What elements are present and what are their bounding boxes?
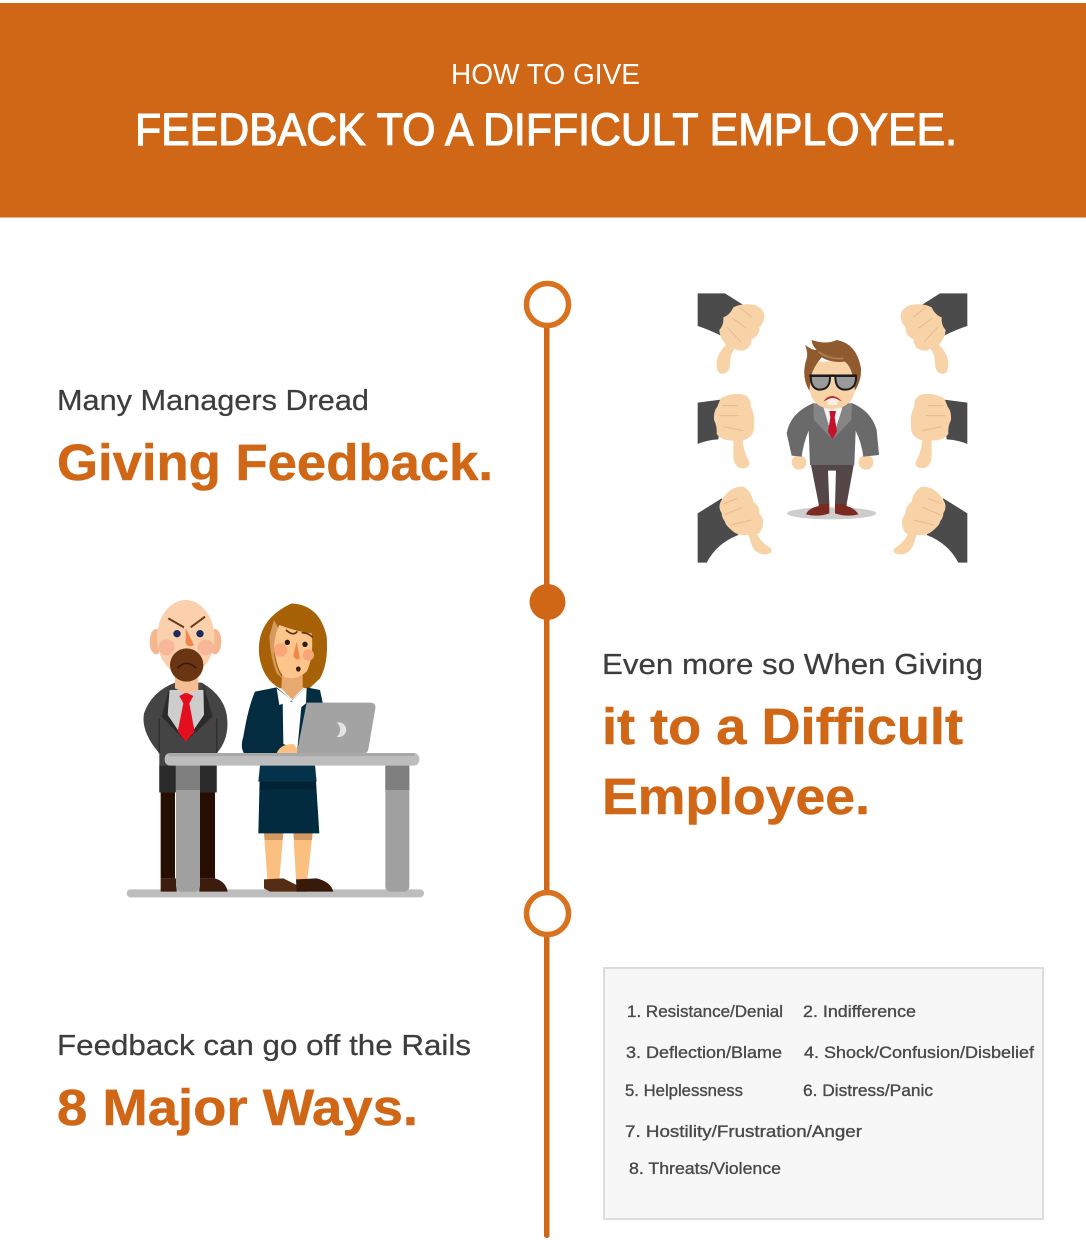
panel: list of eight reactions: 6. Distress/Panic: [803, 1082, 933, 1100]
title: FEEDBACK TO A DIFFICULT EMPLOYEE.: [135, 104, 957, 155]
text block: difficult employee: Employee.: [602, 768, 870, 825]
panel: list of eight reactions: 1. Resistance/Denial: [627, 1003, 783, 1021]
text block: giving feedback: Many Managers Dread: [57, 385, 369, 417]
right thumbs: [893, 293, 967, 563]
panel: list of eight reactions: 2. Indifference: [803, 1003, 916, 1021]
bald manager: [143, 600, 228, 892]
icon: thumbs-down crowd around sad employee: [698, 293, 967, 563]
panel: list of eight reactions: [604, 968, 1043, 1219]
header kicker: HOW TO GIVE: [451, 59, 640, 91]
panel: list of eight reactions: 8. Threats/Violence: [629, 1160, 781, 1178]
text block: difficult employee: [602, 649, 983, 825]
header banner: [0, 3, 1086, 218]
panel: list of eight reactions: 3. Deflection/Blame: [626, 1044, 782, 1062]
illustration: angry manager and worried employee at desk: [127, 600, 424, 897]
text block: difficult employee: Even more so When Giving: [602, 649, 983, 681]
left thumbs: [698, 293, 772, 563]
panel: list of eight reactions: 7. Hostility/Frustration/Anger: [625, 1123, 863, 1141]
timeline node 3: [526, 892, 568, 934]
laptop: [297, 703, 375, 753]
text block: giving feedback: [57, 385, 493, 491]
timeline node 2: [530, 584, 566, 620]
sad employee: [787, 340, 879, 519]
timeline: [526, 284, 568, 1238]
floor bar: [127, 889, 424, 897]
desk: [165, 753, 419, 892]
text block: difficult employee: it to a Difficult: [602, 698, 963, 755]
text block: 8 major ways: Feedback can go off the Rails: [57, 1030, 471, 1062]
timeline node 1: [526, 284, 568, 326]
panel: list of eight reactions: 4. Shock/Confusion/Disbelief: [804, 1044, 1034, 1062]
text block: giving feedback: Giving Feedback.: [57, 434, 493, 491]
panel: list of eight reactions: 5. Helplessness: [625, 1082, 743, 1100]
text block: 8 major ways: [57, 1030, 471, 1136]
worried employee: [242, 603, 333, 892]
text block: 8 major ways: 8 Major Ways.: [57, 1079, 418, 1136]
